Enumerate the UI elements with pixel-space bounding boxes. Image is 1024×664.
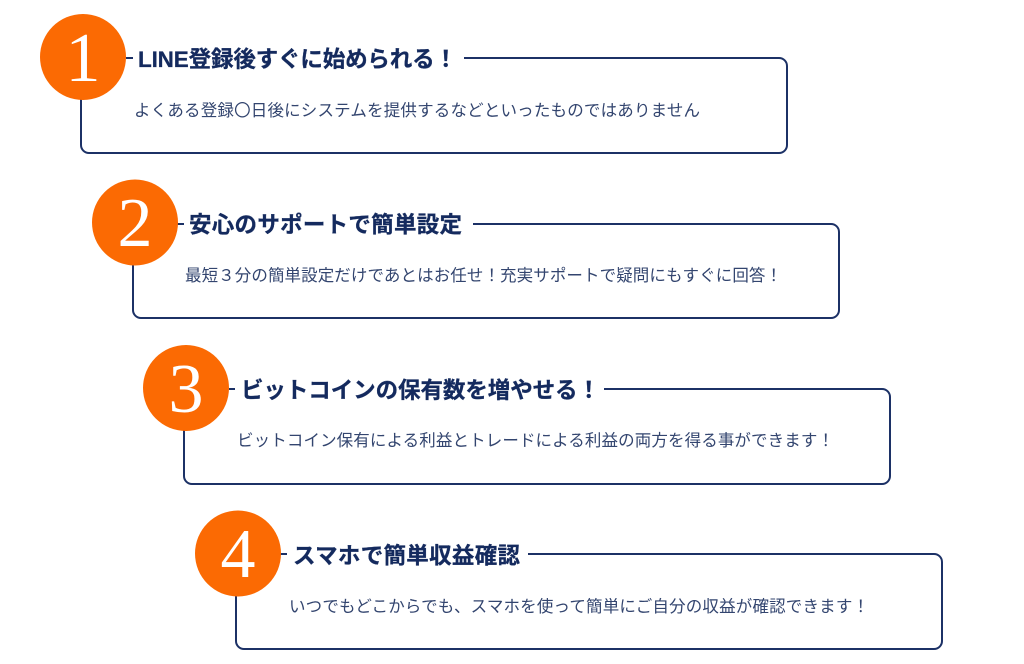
- panel: step 1: [40, 14, 787, 153]
- frame: step 1: [81, 57, 787, 153]
- frame: step 3: [184, 388, 890, 484]
- panel: step 2: [92, 180, 839, 318]
- text: step 3 description: ビットコイン保有による利益とトレードによる利益の両方を得る事ができます！: [237, 431, 834, 450]
- panel: step 3: [143, 345, 890, 484]
- icon: number 3 badge: [143, 345, 229, 431]
- icon: number 4 badge: [195, 510, 281, 596]
- text: step 4 description: いつでもどこからでも、スマホを使って簡単にご自分の収益が確認できます！: [289, 597, 869, 616]
- text: step 2 description: 最短３分の簡単設定だけであとはお任せ！充実サポートで疑問にもすぐに回答！: [185, 266, 782, 285]
- icon: number 4 badge: 4: [220, 516, 256, 593]
- heading: step 1: LINE登録後すぐに始められる！: [138, 47, 457, 72]
- frame: step 4: [236, 553, 942, 649]
- heading: step 4: スマホで簡単収益確認: [293, 544, 520, 568]
- icon: number 3 badge: 3: [168, 351, 204, 428]
- heading: step 2: 安心のサポートで簡単設定: [189, 212, 462, 238]
- icon: number 1 badge: [40, 14, 126, 100]
- icon: number 2 badge: 2: [118, 185, 152, 262]
- panel: step 4: [195, 510, 942, 649]
- icon: number 1 badge: 1: [66, 20, 100, 97]
- text: step 1 description: よくある登録〇日後にシステムを提供するなどといったものではありません: [134, 101, 700, 120]
- frame: step 2: [133, 223, 839, 318]
- icon: number 2 badge: [92, 180, 178, 266]
- heading: step 3: ビットコインの保有数を増やせる！: [241, 378, 600, 403]
